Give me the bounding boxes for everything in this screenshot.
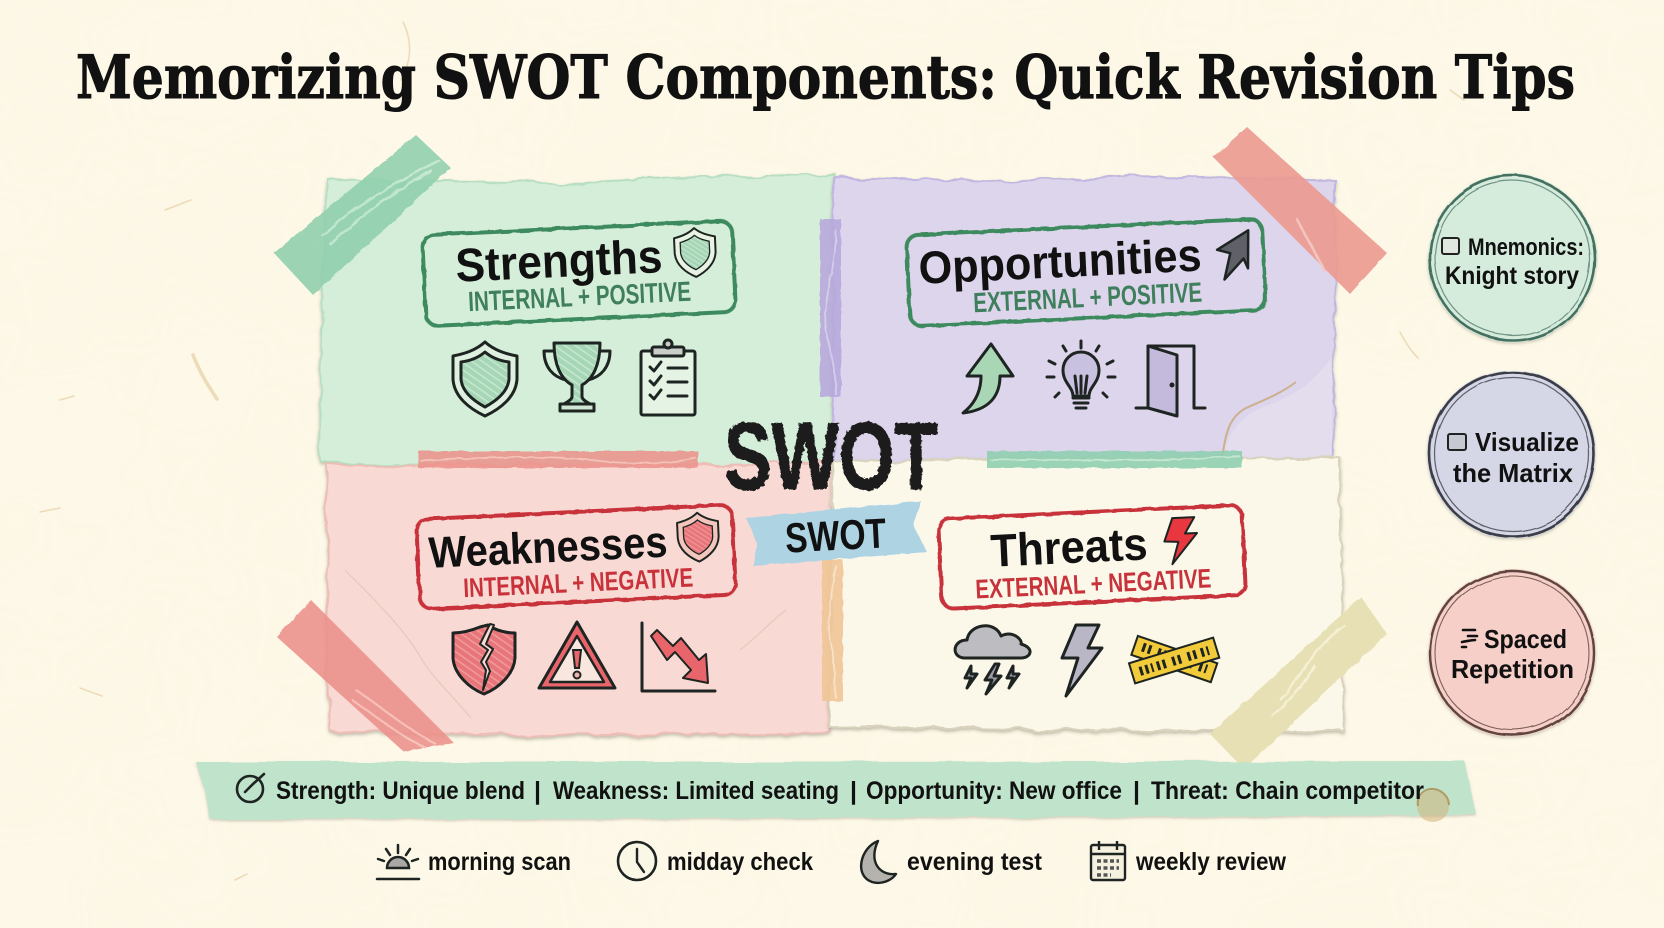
paper: threats	[830, 458, 1344, 732]
icon: small red bolt	[1163, 517, 1198, 565]
icon: repeat glyph	[1462, 630, 1477, 647]
icon: falling chart	[642, 623, 715, 691]
banner tape	[196, 761, 1477, 819]
schedule: midday check	[618, 842, 813, 880]
panel: weaknesses	[327, 462, 833, 735]
banner text: |	[1133, 777, 1140, 805]
stamp: threats heading: EXTERNAL + NEGATIVE	[975, 563, 1212, 604]
icon: calendar	[1091, 841, 1125, 880]
crease stain	[1222, 382, 1296, 458]
icon: small shield	[674, 227, 717, 278]
centre ribbon	[746, 501, 927, 566]
badge disc	[1428, 370, 1596, 538]
schedule: weekly review	[1091, 841, 1286, 880]
banner text: |	[534, 777, 541, 805]
tip badge: spaced repetition	[1428, 569, 1596, 737]
paper: strengths	[320, 175, 836, 468]
crease stain	[345, 570, 786, 718]
stamp: weaknesses heading	[416, 505, 736, 609]
panel: threats	[830, 458, 1344, 732]
tape: strip red	[418, 451, 698, 468]
tip badge: visualize	[1428, 370, 1596, 538]
banner text: Opportunity: New office	[866, 777, 1122, 805]
banner text: Weakness: Limited seating	[553, 777, 839, 805]
icon: moon	[861, 841, 896, 883]
example banner	[196, 761, 1477, 822]
badge text: Mnemonics:	[1468, 234, 1584, 261]
icon: sunrise	[377, 845, 419, 879]
coffee stain	[1417, 789, 1449, 822]
label: morning scan	[428, 848, 571, 876]
stamp: strengths heading: Strengths	[454, 229, 664, 292]
centre SWOT stamp: SWOT	[724, 403, 938, 510]
tape: strip orange	[822, 560, 843, 701]
icon: storm cloud	[955, 626, 1030, 694]
stamp: weaknesses heading: Weaknesses	[428, 518, 669, 578]
icon: open door	[1136, 346, 1205, 416]
ribbon shape	[746, 501, 927, 566]
stamp: strengths heading	[422, 221, 736, 326]
paper: weaknesses	[327, 462, 833, 735]
stamp: opportunities heading: EXTERNAL + POSITIVE	[973, 277, 1203, 318]
icon: small red shield	[677, 512, 720, 563]
schedule: morning scan	[377, 845, 571, 879]
tape: bottom right yellow	[1210, 597, 1387, 769]
badge text: Knight story	[1445, 262, 1579, 290]
stamp: threats heading	[938, 505, 1246, 609]
icon: warning triangle	[539, 622, 615, 688]
label: evening test	[907, 848, 1043, 876]
icon: trophy	[544, 343, 610, 411]
stamp: opportunities heading: Opportunities	[917, 229, 1203, 294]
stamp: threats heading: Threats	[989, 517, 1149, 577]
schedule: evening test	[861, 841, 1043, 883]
icon: lightning bolt	[1062, 625, 1102, 696]
badge text: Spaced	[1484, 624, 1567, 654]
badge text: Visualize	[1475, 427, 1579, 457]
label: weekly review	[1135, 848, 1286, 876]
tip badge: mnemonics	[1428, 174, 1596, 342]
icon: light bulb	[1047, 341, 1115, 408]
label: midday check	[667, 848, 813, 876]
icon: growth arrow	[963, 344, 1013, 413]
icon: small arrow	[1216, 230, 1250, 280]
tape: top right pink	[1213, 127, 1387, 294]
badge text: the Matrix	[1453, 458, 1574, 488]
banner text: Threat: Chain competitor	[1151, 777, 1424, 805]
paper wear patch	[1222, 356, 1332, 458]
tape: bottom left pink	[277, 600, 454, 751]
stamp: weaknesses heading: INTERNAL + NEGATIVE	[463, 562, 694, 603]
banner text: Strength: Unique blend	[276, 777, 525, 805]
badge text: Repetition	[1451, 654, 1574, 684]
panel: strengths	[320, 175, 836, 468]
badge disc	[1428, 174, 1596, 342]
icon: clock	[618, 842, 656, 880]
stamp: strengths heading: INTERNAL + POSITIVE	[468, 276, 692, 317]
panel: opportunities	[833, 176, 1335, 462]
stamp: opportunities heading	[906, 219, 1266, 326]
icon: check dial	[237, 774, 264, 802]
banner text: |	[850, 777, 857, 805]
tape: strip green	[987, 451, 1242, 468]
icon: shield	[453, 342, 517, 416]
tape: top left green	[274, 135, 451, 295]
icon: checkbox	[1442, 238, 1459, 254]
icon: broken shield	[453, 624, 515, 694]
badge disc	[1428, 569, 1596, 737]
icon: checklist clipboard	[641, 340, 695, 415]
tape: strip purple	[820, 219, 841, 397]
paper: opportunities	[833, 176, 1335, 462]
icon: caution tape	[1129, 636, 1219, 683]
ribbon label: SWOT	[784, 509, 888, 562]
icon: matrix box	[1448, 434, 1466, 450]
